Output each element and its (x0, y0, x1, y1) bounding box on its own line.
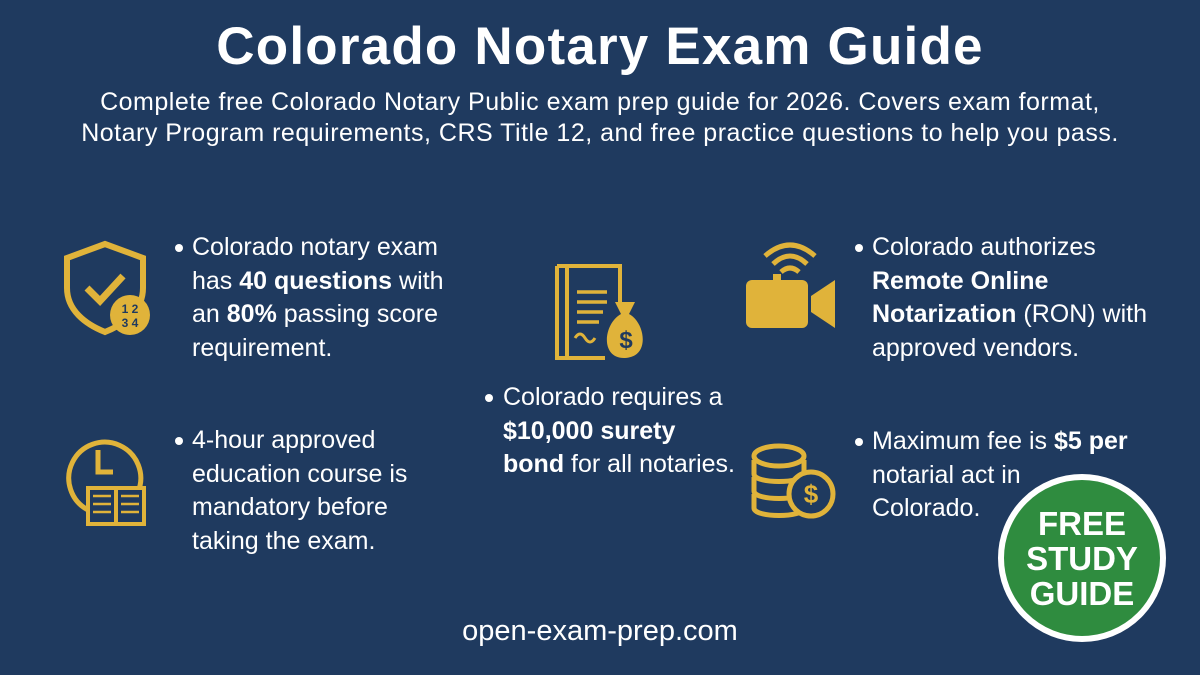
text: education course: taking the exam. (192, 526, 375, 554)
text: maximum fee: Maximum fee is $5 per (872, 427, 1128, 455)
text: surety bond: bond for all notaries. (503, 450, 735, 478)
text: remote online notarization: Colorado authorizes (872, 233, 1096, 261)
text: surety bond: Colorado requires a (503, 383, 723, 411)
text: exam questions: Colorado notary exam (192, 233, 438, 261)
icon: shield check: 1 2 (122, 302, 139, 316)
text: remote online notarization: Remote Online (872, 266, 1048, 294)
title: Colorado Notary Exam Guide (216, 17, 984, 76)
icon: coins: $ (804, 479, 819, 509)
text: exam questions: an 80% passing score (192, 300, 438, 328)
text: remote online notarization (855, 233, 1147, 362)
badge: free study guide (998, 474, 1166, 642)
icon: shield check: 3 4 (122, 316, 139, 330)
badge: free study guide: FREE (1038, 504, 1126, 542)
text: maximum fee: Colorado. (872, 494, 980, 522)
icon: bond document with money bag (555, 264, 643, 360)
text: surety bond: $10,000 surety (503, 416, 675, 444)
icon: bond document with money bag: $ (619, 327, 633, 354)
text: education course (175, 426, 407, 554)
subtitle: Complete free Colorado Notary Public exam prep guide for 2026. Covers exam format, (100, 88, 1100, 116)
footer url: open-exam-prep.com (462, 615, 738, 647)
icon: clock and book (66, 440, 146, 526)
text: surety bond (485, 383, 735, 478)
text: remote online notarization: Notarization (RON) with (872, 300, 1147, 328)
text: exam questions: requirement. (192, 334, 332, 362)
text: maximum fee (855, 427, 1128, 522)
icon: shield check (64, 240, 150, 336)
text: education course: mandatory before (192, 493, 388, 521)
subtitle (81, 88, 1119, 147)
text: maximum fee: notarial act in (872, 460, 1021, 488)
icon: video camera wifi (746, 242, 835, 328)
text: remote online notarization: approved vendors. (872, 334, 1079, 362)
text: education course: education course is (192, 460, 407, 488)
text: exam questions (175, 233, 444, 362)
badge: free study guide: GUIDE (1030, 574, 1134, 612)
badge: free study guide: STUDY (1026, 540, 1138, 576)
text: education course: 4-hour approved (192, 426, 375, 454)
icon: coins (752, 444, 836, 518)
text: exam questions: has 40 questions with (192, 266, 444, 294)
subtitle: Notary Program requirements, CRS Title 12, and free practice questions to help you pass. (81, 119, 1119, 147)
